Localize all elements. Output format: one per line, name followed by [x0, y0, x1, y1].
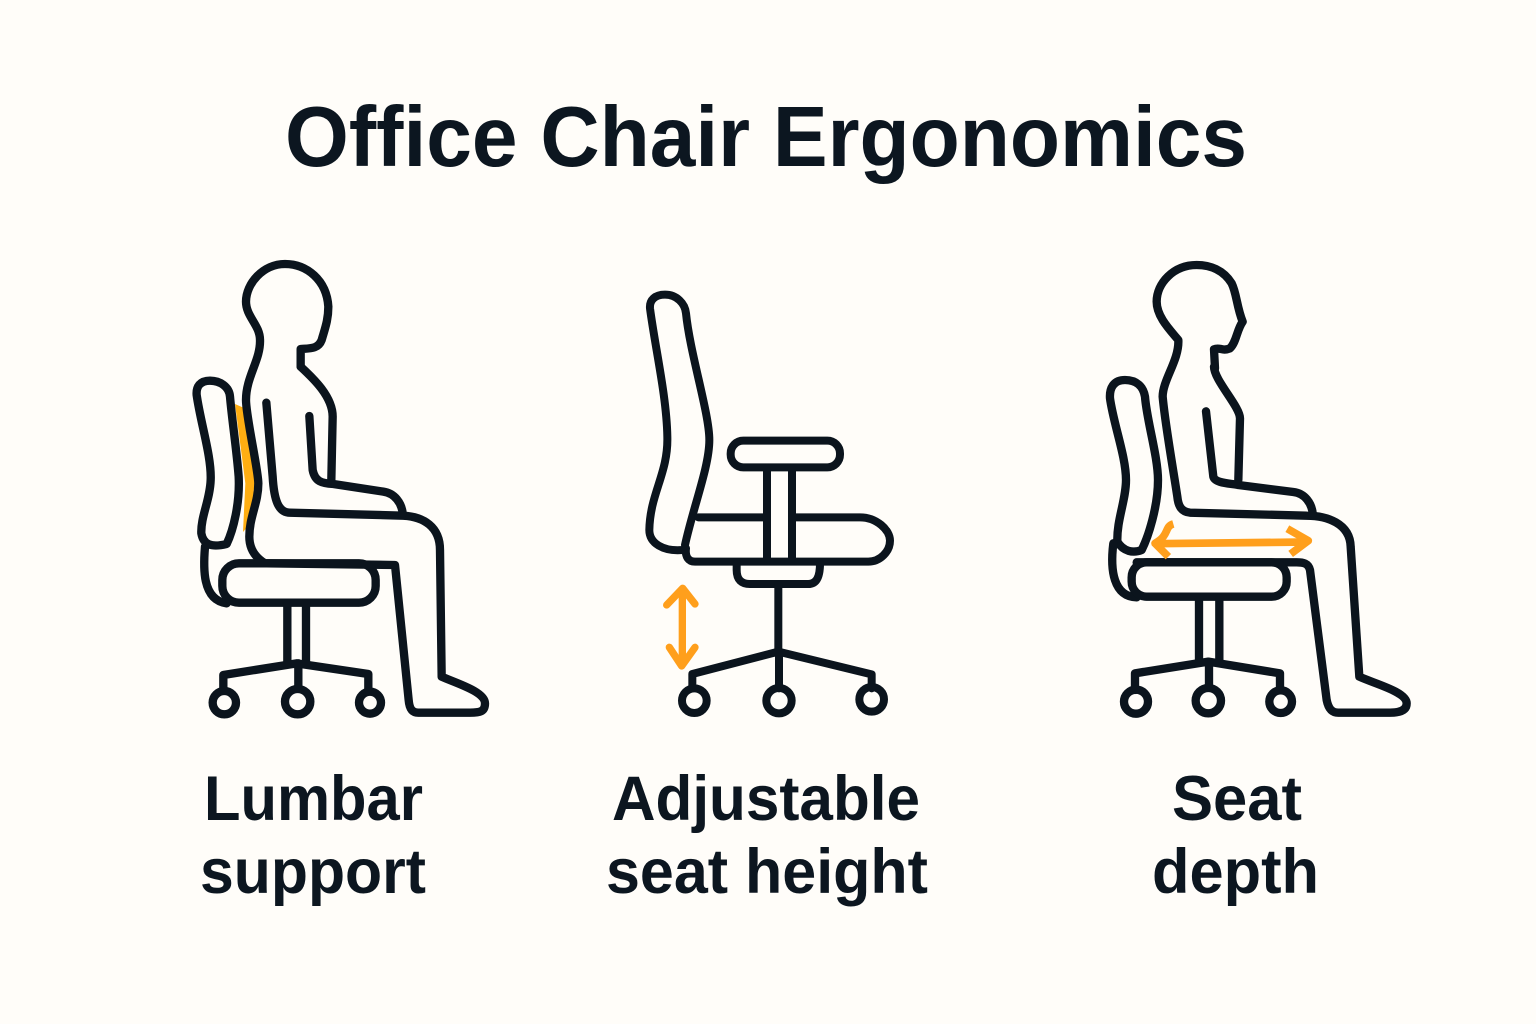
chair — [197, 381, 381, 714]
label: seat depth — [1152, 764, 1319, 907]
panel: seat depth — [1110, 265, 1407, 907]
label: seat depth: depth — [1152, 837, 1319, 907]
arrow: horizontal seat depth — [1155, 524, 1308, 557]
illustration: seated person with lumbar support — [197, 264, 485, 714]
label: seat depth: Seat — [1172, 764, 1302, 834]
illustration: seated person with seat depth arrow — [1110, 265, 1407, 714]
label: adjustable seat height: Adjustable — [612, 764, 920, 834]
label: adjustable seat height: seat height — [606, 837, 928, 907]
label: lumbar support: Lumbar — [204, 764, 423, 834]
chair outline — [649, 295, 890, 713]
label: lumbar support — [200, 764, 426, 907]
chair — [1110, 380, 1292, 714]
title: Office Chair Ergonomics — [285, 90, 1247, 185]
panel: lumbar support — [197, 264, 485, 907]
label: lumbar support: support — [200, 837, 426, 907]
panel: adjustable seat height — [606, 295, 928, 907]
arrow: vertical height adjustment — [667, 588, 695, 666]
figure outline — [246, 264, 485, 713]
highlight: lumbar strip — [235, 404, 255, 532]
figure outline — [1137, 265, 1407, 713]
illustration: office chair — [649, 295, 890, 713]
label: adjustable seat height — [606, 764, 928, 907]
